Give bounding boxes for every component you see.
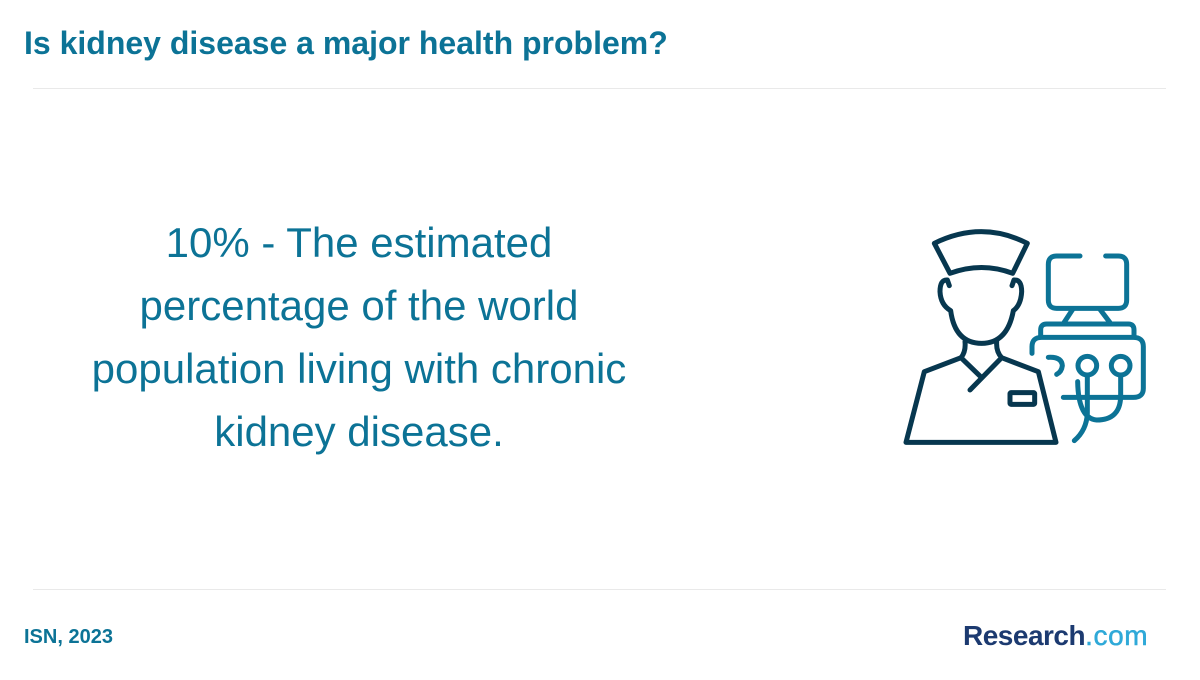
text block: key statistic <box>92 219 626 455</box>
text block: key statistic: percentage of the world <box>140 282 578 329</box>
text block: key statistic: kidney disease. <box>214 408 504 455</box>
text block: key statistic: 10% - The estimated <box>166 219 552 266</box>
logo: Research.com <box>963 620 1148 651</box>
icon part: nurse <box>906 232 1056 442</box>
icon: nurse with medical monitor and stethoscope <box>904 229 1146 445</box>
icon part: monitor and stethoscope <box>1032 256 1143 441</box>
source: ISN, 2023 <box>24 626 113 648</box>
title: Is kidney disease a major health problem? <box>24 25 668 61</box>
text block: key statistic: population living with chronic <box>92 345 626 392</box>
